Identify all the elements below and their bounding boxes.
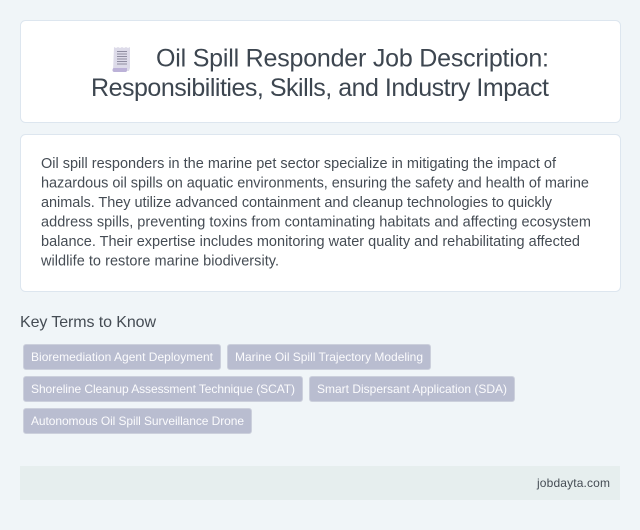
tag: surveillance drone [24,408,252,434]
text block: description: Oil spill responders in the marine pet sector specialize in mitigating the impact of [41,156,557,172]
heading: title [91,44,549,102]
tag: trajectory modeling [228,344,430,370]
panel: title card [20,20,620,122]
panel: description card [20,134,620,292]
footer: site name: jobdayta.com [536,476,610,490]
footer bar [20,466,620,500]
tag: SCAT: Shoreline Cleanup Assessment Technique (SCAT) [31,382,295,396]
heading: title: Oil Spill Responder Job Description: [156,44,549,72]
text block: description [40,156,591,270]
text block: description: animals. They utilize advanced containment and cleanup technologies to quickly [41,195,553,211]
tag: SCAT [24,376,302,402]
text block: description: balance. Their expertise includes monitoring water quality and rehabilitating affected [41,234,580,250]
heading: key terms: Key Terms to Know [20,314,156,331]
icon: document scroll [112,47,130,72]
tag list: key terms [24,344,514,434]
text block: description: address spills, preventing toxins from contaminating habitats and affecting ecosystem [41,214,591,230]
tag: bioremediation: Bioremediation Agent Deployment [31,350,214,364]
text block: description: hazardous oil spills on aquatic environments, ensuring the safety and health of marine [41,176,589,192]
text block: description: wildlife to restore marine biodiversity. [40,254,279,270]
heading: title: Responsibilities, Skills, and Industry Impact [91,74,549,102]
tag: SDA [310,376,514,402]
tag: trajectory modeling: Marine Oil Spill Trajectory Modeling [235,350,423,364]
tag: SDA: Smart Dispersant Application (SDA) [317,382,507,396]
tag: surveillance drone: Autonomous Oil Spill Surveillance Drone [31,414,244,428]
tag: bioremediation [24,344,220,370]
